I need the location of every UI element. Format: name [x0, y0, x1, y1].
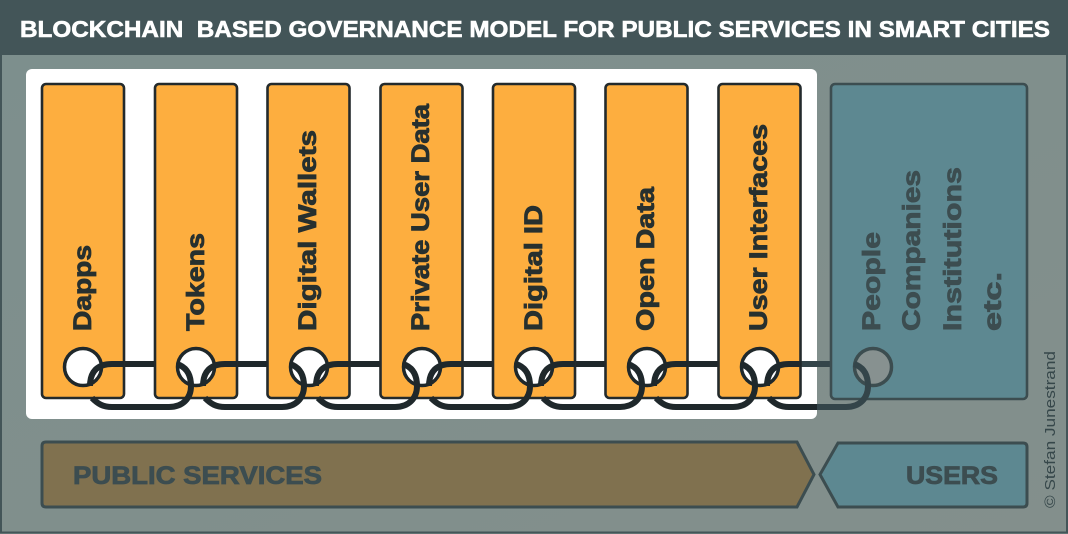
column: Open Data	[606, 84, 688, 398]
column: Private User Data: Private User Data	[407, 103, 435, 331]
chain: connection holes	[64, 348, 892, 386]
title: BLOCKCHAIN BASED GOVERNANCE MODEL FOR PUBLIC SERVICES IN SMART CITIES	[20, 16, 1050, 42]
label: Companies: Companies	[898, 170, 926, 331]
column: User Interfaces: User Interfaces	[745, 124, 773, 331]
credit: © Stefan Junestrand	[1042, 351, 1059, 508]
column: Private User Data	[380, 84, 462, 398]
column: Tokens	[155, 84, 237, 398]
column: Open Data: Open Data	[632, 186, 660, 331]
column: Digital ID	[493, 84, 575, 398]
header band	[0, 0, 1068, 55]
label: Institutions: Institutions	[939, 167, 967, 331]
column: User Interfaces	[718, 84, 800, 398]
arrow: users: USERS	[906, 462, 998, 490]
chain: links behind the columns	[120, 361, 832, 367]
label: People: People	[858, 232, 886, 331]
column: Tokens: Tokens	[182, 233, 210, 331]
arrow: public services	[42, 442, 814, 507]
arrow: public services: PUBLIC SERVICES	[73, 462, 322, 490]
arrow: users	[820, 443, 1027, 507]
column: Dapps	[42, 84, 124, 398]
column: Dapps: Dapps	[69, 245, 97, 331]
panel: white backing for service columns	[26, 69, 817, 419]
chain: interlocking links in front	[90, 364, 868, 407]
label: etc.: etc.	[979, 272, 1007, 331]
column: Digital Wallets	[268, 84, 350, 398]
column: Digital ID: Digital ID	[520, 205, 548, 331]
panel: users column	[831, 84, 1027, 399]
column: Digital Wallets: Digital Wallets	[294, 130, 322, 331]
